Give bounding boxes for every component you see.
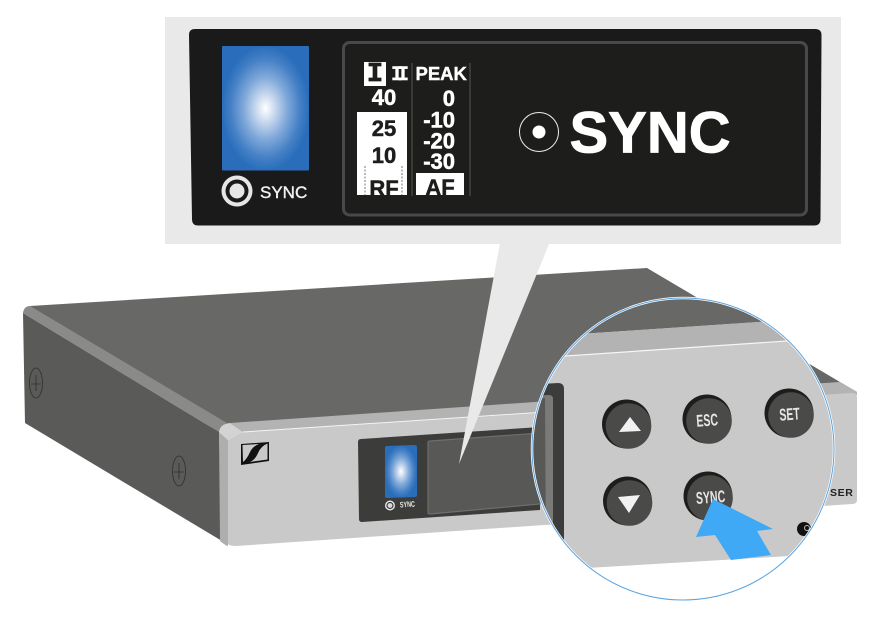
PEAK scale xyxy=(416,63,468,200)
device top face xyxy=(30,268,857,432)
blue LED xyxy=(222,46,309,170)
blue arrow xyxy=(696,499,773,560)
magnified top face xyxy=(588,299,762,334)
screw left xyxy=(30,368,42,398)
magnifier outline xyxy=(532,298,834,600)
PEAK scale: -30 xyxy=(423,149,455,174)
callout background panel xyxy=(165,17,841,244)
small control panel xyxy=(358,427,540,522)
mini sync label: SYNC xyxy=(400,501,415,510)
callout pointer xyxy=(459,243,550,464)
top left bevel edge xyxy=(23,306,227,432)
magnified bevel xyxy=(566,322,786,356)
channel indicator xyxy=(364,60,409,90)
button: SET xyxy=(764,388,814,438)
column dividers xyxy=(412,63,470,196)
button: SYNC xyxy=(684,472,733,521)
button: down xyxy=(603,476,652,526)
LCD frame xyxy=(344,42,806,215)
channel indicator: I xyxy=(397,64,409,87)
button: SYNC: SYNC xyxy=(695,486,726,508)
mini LED xyxy=(385,445,417,498)
device body xyxy=(23,268,857,546)
brand logo xyxy=(241,442,269,465)
button: ESC xyxy=(682,394,732,444)
RF scale: 40 xyxy=(372,85,396,110)
front left corner strip xyxy=(219,432,228,546)
RF scale: 25 xyxy=(372,116,396,141)
device front face xyxy=(228,393,857,546)
button: SET: SET xyxy=(779,404,801,424)
front highlight line xyxy=(243,411,560,432)
magnified display edge xyxy=(533,383,564,540)
magnifier circle xyxy=(520,290,850,600)
black display panel xyxy=(189,29,822,226)
mini screen xyxy=(428,433,540,514)
big SYNC label: SYNC xyxy=(570,100,731,166)
magnified front face xyxy=(548,342,833,568)
mini sync ring xyxy=(385,500,395,510)
sync target icon xyxy=(520,112,558,152)
channel indicator: I xyxy=(391,64,403,87)
device left side panel xyxy=(23,313,222,541)
PEAK scale: AF xyxy=(425,175,455,200)
sync label: SYNC xyxy=(260,183,307,202)
PEAK scale: -10 xyxy=(423,108,455,132)
PEAK scale: 0 xyxy=(443,86,455,111)
RF scale: 10 xyxy=(372,143,396,168)
SER lettering: SER xyxy=(830,487,853,499)
front top bevel xyxy=(230,382,857,432)
screw right xyxy=(172,456,186,486)
front corner highlight xyxy=(219,423,243,440)
RF scale xyxy=(357,85,407,201)
PEAK scale: PEAK xyxy=(416,63,468,84)
button: up xyxy=(602,400,651,449)
button: ESC: ESC xyxy=(696,410,719,430)
magnified highlight line xyxy=(565,340,787,356)
small black jack xyxy=(797,522,811,536)
sync ring icon xyxy=(222,176,252,206)
RF scale: RF xyxy=(369,176,399,201)
channel indicator: I xyxy=(367,60,383,90)
PEAK scale: -20 xyxy=(423,128,455,154)
